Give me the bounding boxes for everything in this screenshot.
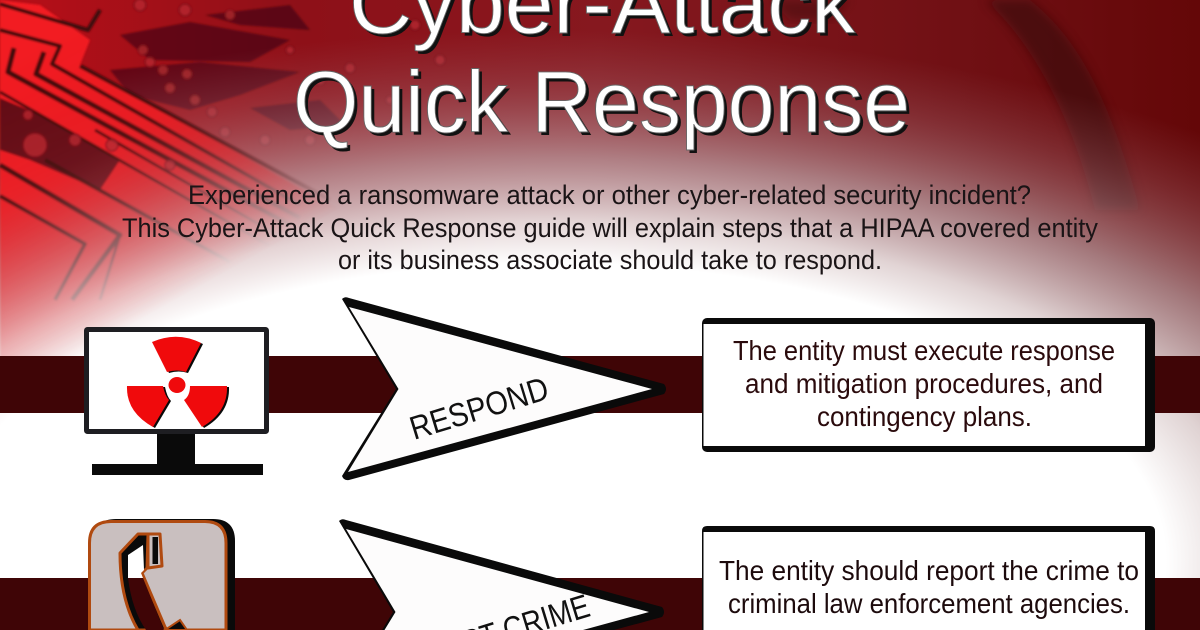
band: row 1 — [0, 356, 1200, 413]
callout: report crime description: The entity should report the crime to — [719, 555, 1139, 586]
callout: respond description: and mitigation procedures, and — [745, 368, 1103, 399]
arrow label: respond: RESPOND — [405, 370, 553, 447]
intro text: Experienced a ransomware attack or other cyber-related security incident? — [188, 180, 1031, 210]
callout: respond description: The entity must execute response — [733, 335, 1115, 366]
callout: respond description — [702, 318, 1155, 452]
callout: respond description: contingency plans. — [817, 401, 1032, 432]
title: Quick Response — [296, 57, 913, 154]
band: row 2 — [0, 578, 1200, 630]
callout: report crime description — [702, 526, 1155, 630]
intro text: This Cyber-Attack Quick Response guide will explain steps that a HIPAA covered entity — [122, 213, 1098, 243]
title — [293, 0, 913, 154]
icon: computer monitor with radiation symbol — [86, 330, 266, 475]
icon: telephone handset tile — [90, 519, 235, 630]
intro text: or its business associate should take to respond. — [338, 245, 882, 275]
title: Quick Response — [293, 54, 910, 151]
intro text — [122, 180, 1098, 275]
callout: report crime description: criminal law enforcement agencies. — [728, 588, 1130, 619]
arrow: respond — [342, 297, 666, 480]
arrow: report crime — [339, 519, 664, 630]
